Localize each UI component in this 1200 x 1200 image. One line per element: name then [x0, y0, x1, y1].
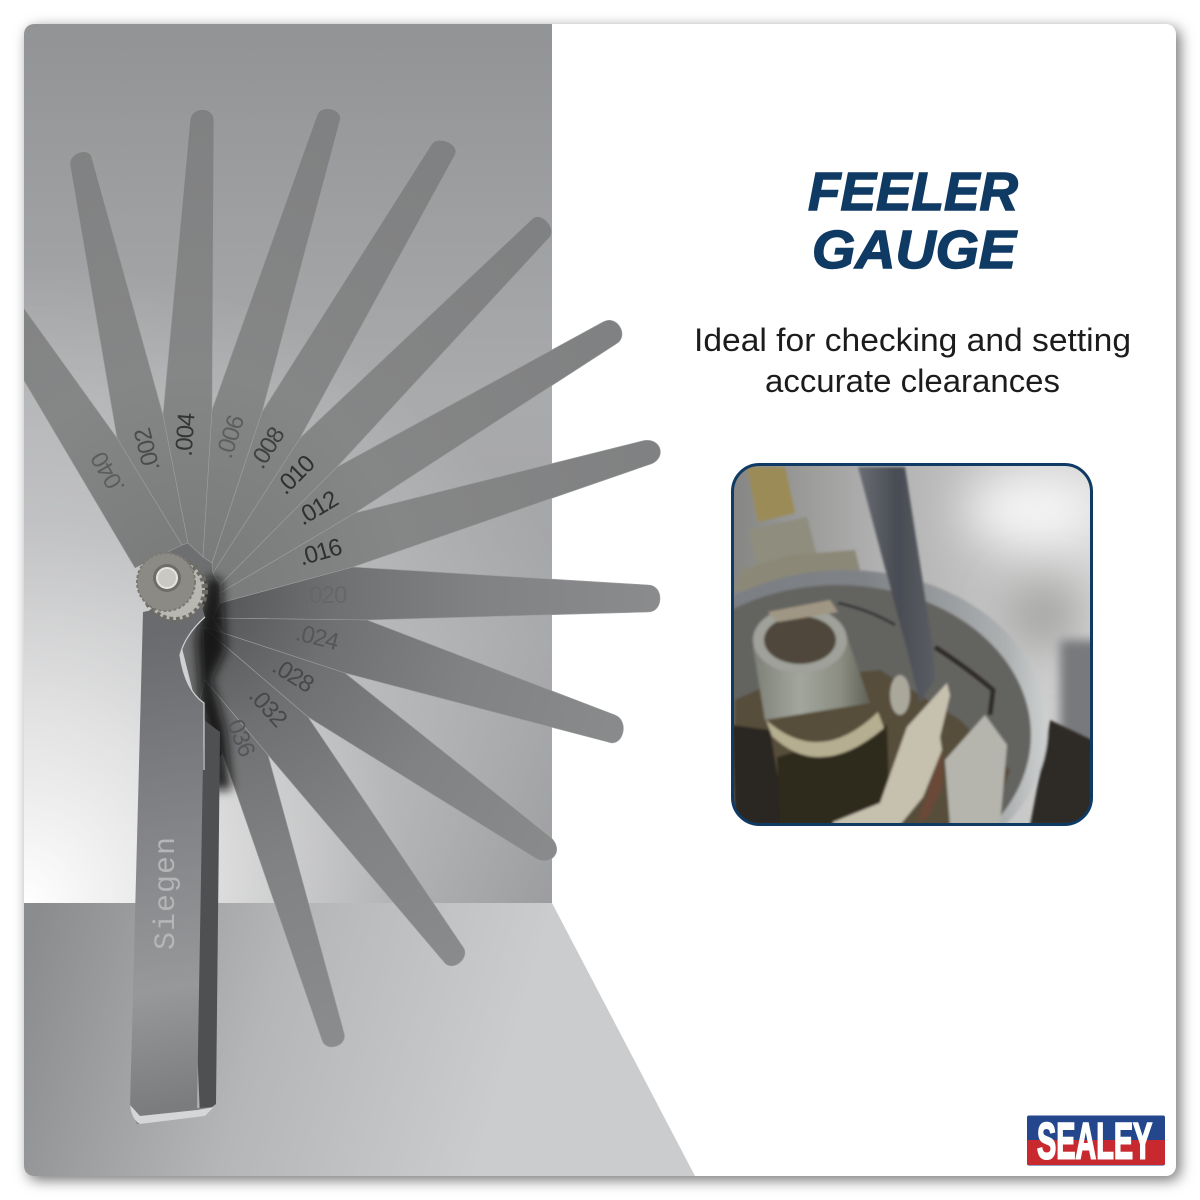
blade size labels: .004: [171, 412, 201, 457]
description text: Ideal for checking and setting: [694, 322, 1131, 358]
title: GAUGE: [812, 220, 1018, 280]
blade size labels: .012: [292, 486, 343, 531]
gauge blades fan: [0, 108, 660, 1047]
description text: [694, 322, 1131, 399]
blade size labels: .024: [293, 619, 341, 656]
blade size labels: .008: [245, 422, 291, 474]
knurled hub: [137, 553, 205, 620]
blade size labels: [86, 412, 347, 761]
shadow behind hub: [196, 575, 232, 790]
blade size labels: .036: [219, 710, 260, 761]
blade size labels: .040: [86, 447, 131, 498]
blade size labels: .020: [304, 582, 347, 609]
title: FEELER: [808, 162, 1018, 222]
blade size labels: .002: [129, 425, 166, 474]
engraved brand: Siegen: [150, 836, 184, 950]
description text: accurate clearances: [765, 363, 1060, 399]
panel: studio backdrop: [24, 24, 695, 1176]
blade size labels: .016: [296, 533, 345, 571]
blade size labels: .006: [211, 412, 250, 462]
photo: feeler gauge in distributor: [731, 463, 1093, 826]
title: [808, 162, 1018, 280]
logo: Sealey: SEALEY: [1037, 1113, 1152, 1170]
blade size labels: .028: [267, 653, 319, 699]
feeler gauge product: [0, 108, 660, 1124]
blade size labels: .010: [271, 450, 320, 500]
blade size labels: .032: [243, 682, 292, 733]
handle: [130, 600, 220, 1124]
